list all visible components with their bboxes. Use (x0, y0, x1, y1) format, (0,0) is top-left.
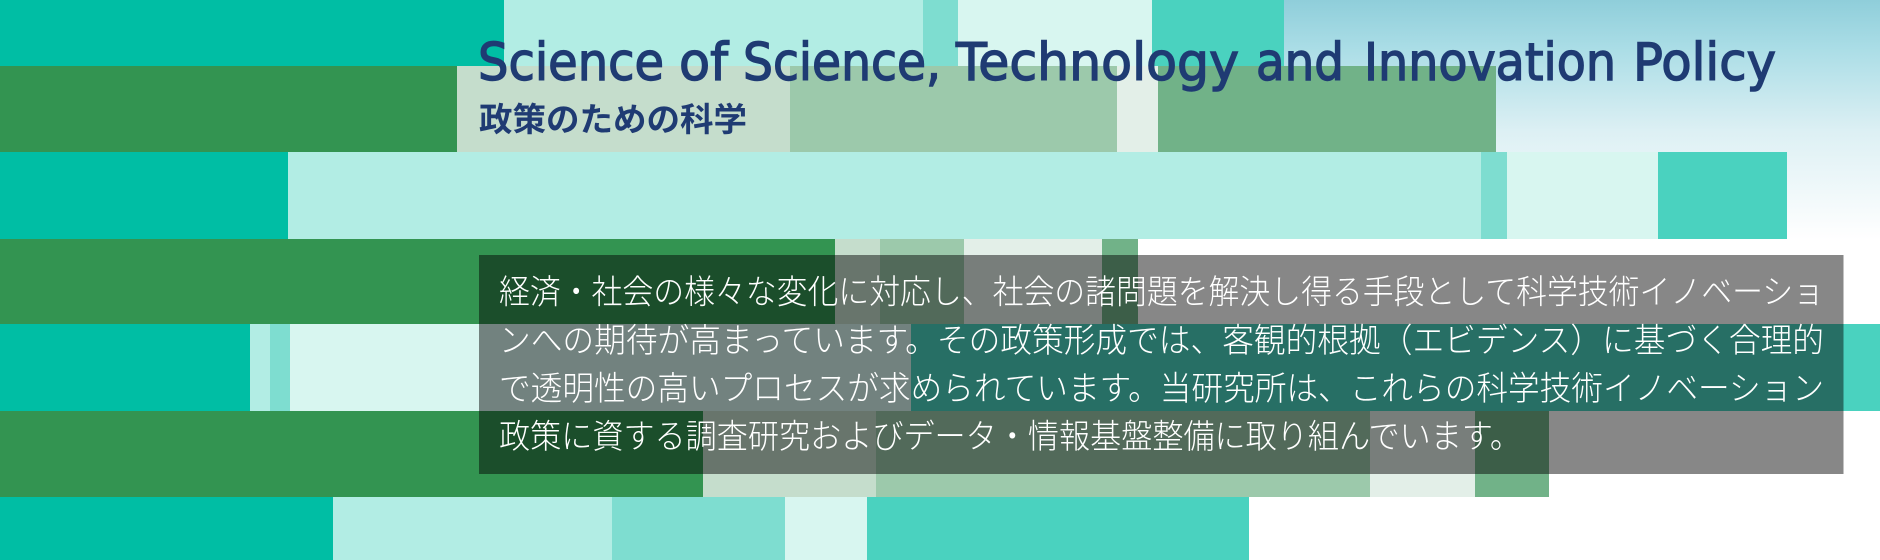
title (478, 33, 1776, 93)
panel: translucent backdrop (479, 255, 1844, 474)
description text: ンへの期待が高まっています。その政策形成では、客観的根拠（エビデンス）に基づく合理的 (499, 323, 1824, 360)
bar row 1 (0, 0, 1284, 66)
title: Science, (743, 33, 941, 93)
subtitle: 政策のための科学 (479, 101, 747, 138)
title: Science (478, 33, 664, 93)
bar row 2 (0, 66, 1496, 152)
description text: で透明性の高いプロセスが求められています。当研究所は、これらの科学技術イノベーション (499, 371, 1824, 408)
bar row 5 (0, 324, 1880, 411)
title: of (679, 33, 730, 93)
title: Policy (1633, 33, 1776, 93)
title: and (1256, 33, 1344, 93)
bar row 7 (0, 497, 1249, 560)
bar row 6 (0, 411, 1549, 497)
title: Innovation (1364, 33, 1616, 93)
description text: 政策に資する調査研究およびデータ・情報基盤整備に取り組んでいます。 (499, 419, 1521, 456)
title: Technology (955, 33, 1239, 93)
description panel (479, 255, 1844, 474)
bar row 4 (0, 239, 1138, 324)
sky gradient background (1284, 0, 1880, 240)
bar row 3 (0, 152, 1787, 239)
description text (499, 274, 1824, 456)
